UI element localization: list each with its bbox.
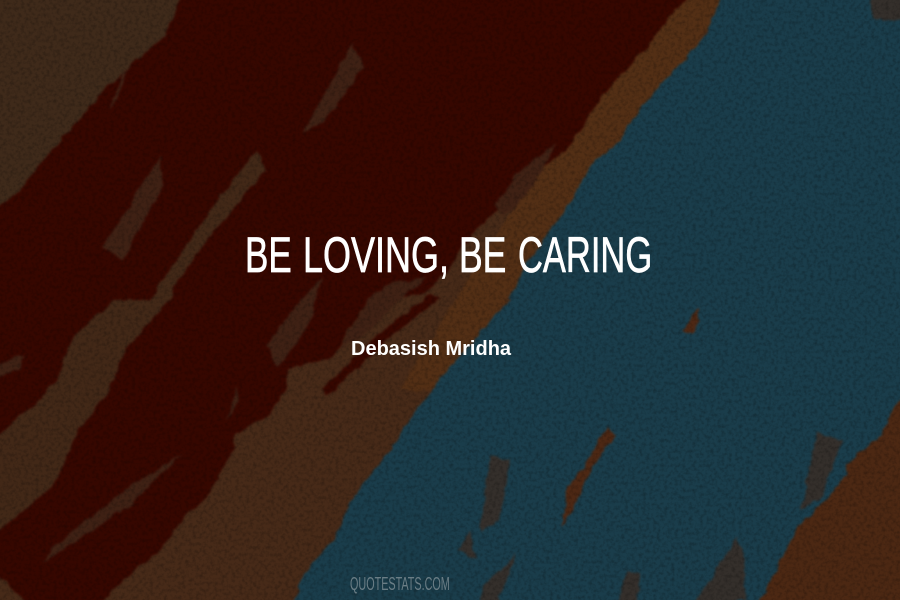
brown streaks in teal — [563, 307, 700, 527]
fine brown streaks in stroke — [0, 43, 557, 563]
bottom-right brown patch — [750, 395, 900, 600]
author: Debasish Mridha — [351, 338, 511, 360]
main brown streak — [0, 150, 265, 545]
title: BE — [245, 227, 292, 283]
title: LOVING, — [303, 227, 449, 283]
title — [245, 227, 652, 283]
teal paint area — [290, 0, 900, 600]
orange-brown band beside teal — [400, 0, 740, 390]
title: BE — [459, 227, 506, 283]
thin dark streak — [322, 295, 440, 396]
dark red brush stroke — [0, 0, 700, 600]
title: CARING — [518, 227, 652, 283]
top-left brown patch — [0, 0, 205, 225]
source watermark: QUOTESTATS.COM — [350, 574, 450, 594]
